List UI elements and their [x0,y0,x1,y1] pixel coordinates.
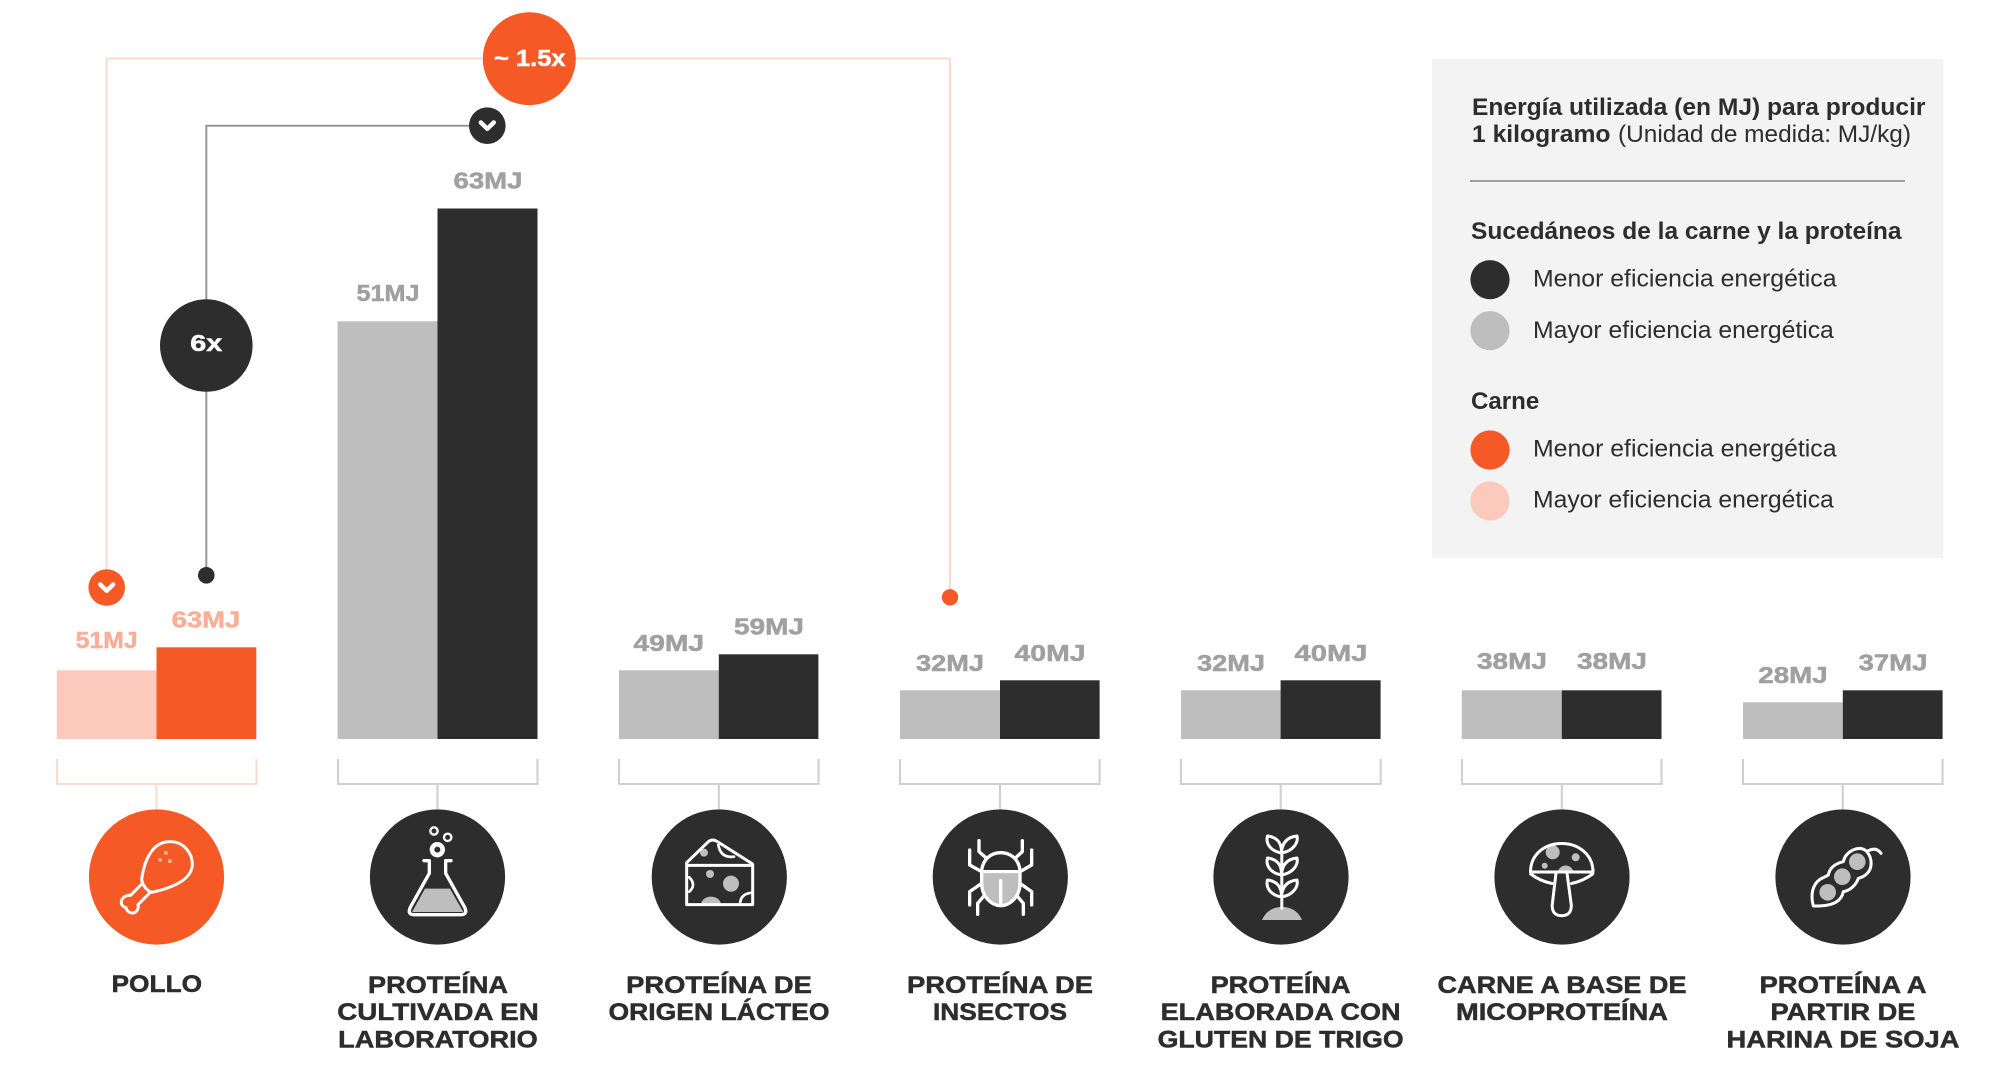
label: HARINA DE SOJA [1726,1026,1960,1054]
label: PROTEÍNA [1211,971,1351,999]
comparison connector: chicken to cultured protein [206,126,487,575]
icon: beetle [933,809,1068,945]
bars [900,680,1100,739]
bars [1743,690,1943,739]
column: Proteína cultivada en laboratorio [337,168,539,1053]
label: CARNE A BASE DE [1438,972,1686,999]
label: POLLO [112,971,202,998]
legend heading: (Unidad de medida: MJ/kg) [1618,121,1911,148]
value: 38MJ: 38MJ [1577,648,1647,674]
label: MICOPROTEÍNA [1456,998,1668,1026]
icon: soy pod [1775,809,1911,945]
bracket [57,759,256,809]
panel: legend [1432,59,1944,558]
legend item: dark, lower efficiency [1470,260,1837,299]
icon: cheese [652,809,787,945]
label: GLUTEN DE TRIGO [1158,1026,1404,1054]
label [608,971,830,1026]
value: 32MJ: 32MJ [916,650,984,676]
label [1158,971,1404,1054]
label [1438,972,1686,1026]
legend item: pink, higher efficiency [1470,481,1834,521]
marker: dark chevron [469,107,506,144]
column: Proteína a partir de harina de soja [1726,650,1960,1054]
marker: orange dot [942,589,958,606]
legend item: orange, lower efficiency: Menor eficiencia energética [1533,436,1837,463]
label: PROTEÍNA DE [907,971,1093,999]
bracket [338,759,538,809]
column: Proteína de insectos [900,640,1100,1026]
label [1726,971,1960,1054]
icon: wheat [1213,809,1349,945]
label: ORIGEN LÁCTEO [608,998,830,1026]
badge: 6x: 6x [190,330,223,356]
label: ELABORADA CON [1161,999,1401,1026]
label: PROTEÍNA A [1760,971,1927,999]
legend item: grey, higher efficiency [1470,311,1834,350]
label: PROTEÍNA [368,971,508,999]
value: 63MJ: 63MJ [454,168,522,194]
label: PROTEÍNA DE [626,971,812,999]
value: 59MJ: 59MJ [734,614,804,640]
legend group heading: meat: Carne [1471,388,1539,415]
column: Proteína de origen lácteo [608,614,830,1026]
bars [338,208,538,739]
label [907,971,1093,1026]
label: LABORATORIO [338,1026,538,1054]
bracket [619,759,818,809]
column: Pollo [57,607,256,998]
value: 40MJ: 40MJ [1294,640,1368,666]
bracket [1181,759,1381,809]
label: INSECTOS [933,999,1067,1026]
column: Proteína elaborada con gluten de trigo [1158,640,1404,1054]
bars [57,647,256,739]
value: 37MJ: 37MJ [1858,650,1928,676]
marker: dark dot [198,567,215,584]
label: CULTIVADA EN [337,999,539,1026]
bars [1181,680,1381,739]
bracket [1743,759,1943,809]
icon: flask [370,809,505,945]
label: PARTIR DE [1770,999,1916,1026]
value: 28MJ: 28MJ [1758,662,1828,688]
icon: mushroom [1494,809,1630,945]
value: 51MJ: 51MJ [356,280,420,306]
legend item: pink, higher efficiency: Mayor eficiencia energética [1533,487,1834,514]
value: 32MJ: 32MJ [1197,650,1265,676]
bars [619,654,818,739]
legend item: orange, lower efficiency [1470,430,1837,470]
marker: orange chevron [88,569,125,606]
column: Carne a base de micoproteína [1438,648,1686,1026]
legend item: grey, higher efficiency: Mayor eficiencia energética [1533,317,1834,344]
value: 49MJ: 49MJ [633,630,704,656]
legend item: dark, lower efficiency: Menor eficiencia energética [1533,266,1837,293]
legend heading [1472,94,1926,148]
value: 38MJ: 38MJ [1477,648,1547,674]
bracket [1462,759,1662,809]
value: 40MJ: 40MJ [1014,640,1086,666]
badge: about 1.5x [483,12,576,105]
bars [1462,690,1662,739]
icon: chicken leg [89,809,224,945]
badge: about 1.5x: ~ 1.5x [494,45,566,71]
label [337,971,539,1054]
value: 51MJ: 51MJ [76,627,138,653]
legend heading: Energía utilizada (en MJ) para producir [1472,94,1926,121]
value: 63MJ: 63MJ [172,607,240,633]
bracket [900,759,1100,809]
legend group heading: substitutes: Sucedáneos de la carne y la proteína [1471,218,1902,245]
comparison connector: chicken to insects [107,58,950,597]
badge: 6x [160,299,253,392]
legend heading: 1 kilogramo [1472,121,1610,148]
